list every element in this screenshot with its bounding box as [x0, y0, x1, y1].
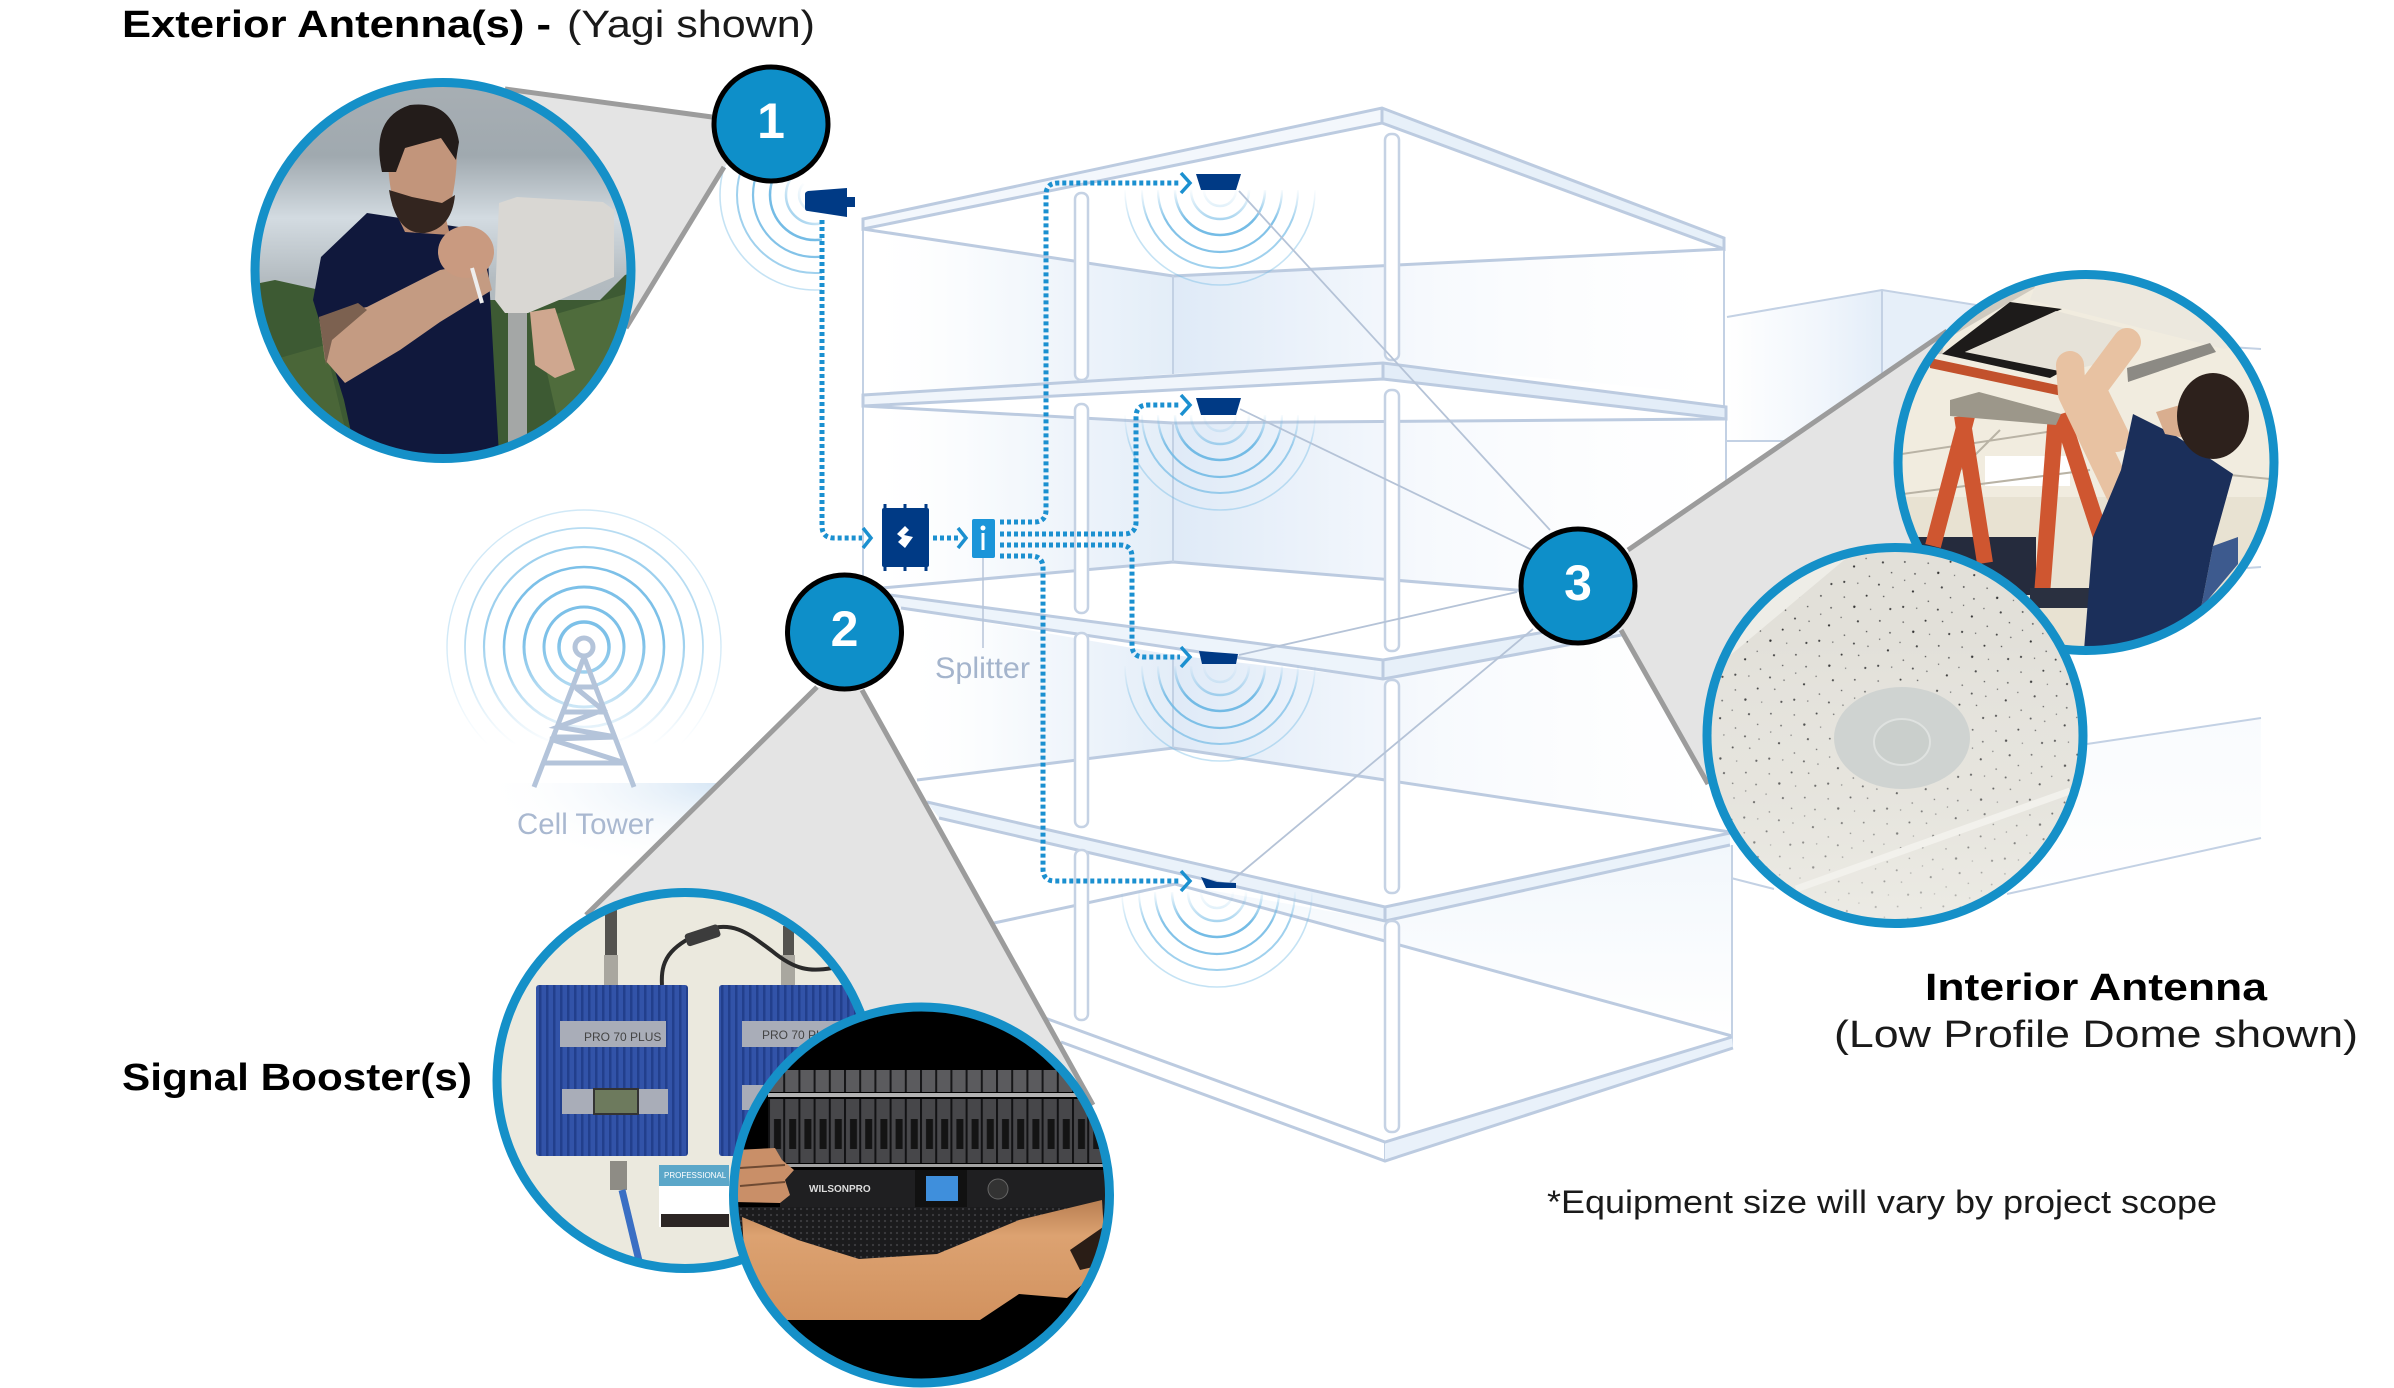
ladder rung — [2030, 588, 2090, 608]
leader lines from antennas to badge 3 — [1230, 191, 1550, 882]
icon: signal booster — [882, 504, 929, 571]
hand shadow — [1070, 1228, 1102, 1270]
signal waves: interior antenna 1 — [1125, 190, 1315, 285]
blue chair — [2201, 537, 2238, 608]
neck skin — [2156, 405, 2185, 438]
left hand — [735, 1148, 794, 1203]
icon: exterior antenna — [805, 188, 855, 217]
floor 3 walls — [901, 608, 1730, 832]
slab 4 — [927, 802, 1730, 921]
hand — [438, 226, 494, 270]
large ceiling tile — [2034, 285, 2040, 288]
number badge 2: 2 — [831, 601, 858, 657]
floor 2 walls — [863, 406, 1726, 608]
neck — [392, 205, 450, 235]
slab 1 — [863, 108, 1724, 249]
jumper cable — [662, 927, 832, 985]
footnote: *Equipment size will vary by project scope — [1547, 1184, 2217, 1220]
lighter ceiling corner — [1700, 545, 1862, 680]
booster unit 1 — [536, 985, 688, 1156]
callout cone 3 — [1621, 331, 2086, 784]
ladder legs — [1933, 414, 2104, 595]
tower mast — [534, 638, 634, 787]
photo: technician installing ceiling antenna — [1890, 270, 2285, 667]
hair — [2177, 373, 2249, 459]
arms — [2070, 342, 2127, 492]
cable to antenna 2 — [1000, 405, 1180, 534]
heading: exterior antenna — [122, 4, 815, 46]
installation sign — [659, 1165, 729, 1227]
antennas — [605, 905, 617, 955]
right ceiling rail — [2127, 343, 2216, 382]
dome antenna — [1834, 687, 1970, 789]
ladder cap — [1950, 392, 2061, 425]
cable to antenna 4 — [1000, 556, 1180, 881]
other arm — [530, 308, 575, 378]
heading: interior antenna: Interior Antenna — [1925, 967, 2268, 1009]
arm — [742, 1200, 1106, 1320]
monitor — [1916, 537, 2036, 595]
inner ceiling tile — [1965, 311, 2127, 372]
ground shading — [470, 783, 740, 873]
tower signal rings — [447, 510, 721, 784]
icon: splitter — [972, 519, 995, 558]
slab 2 — [863, 363, 1726, 419]
photo: technician with exterior antenna — [250, 78, 640, 470]
ceiling grid — [1895, 430, 2280, 495]
number badge 1: 1 — [757, 93, 785, 149]
booster unit 2: PRO 70 PLUS — [762, 1028, 839, 1042]
signal waves: interior antenna 3 — [1125, 666, 1315, 761]
shirt — [2084, 414, 2233, 650]
cable booster to splitter — [933, 536, 958, 540]
orange beam — [1930, 358, 2062, 396]
cable from exterior antenna to booster — [822, 220, 862, 538]
splitter label: Splitter — [935, 652, 1030, 685]
booster unit 2 — [719, 985, 860, 1156]
photo: wall-mounted boosters — [490, 885, 880, 1275]
slab 3 — [882, 594, 1730, 679]
photo: rack-mounted booster: WILSONPRO — [809, 1184, 871, 1195]
support columns — [1075, 134, 1399, 1132]
face — [388, 138, 457, 203]
splitter label — [935, 558, 1030, 685]
building floor plan wireframe — [863, 108, 1733, 1161]
installation sign: PROFESSIONAL — [664, 1171, 727, 1180]
number badge 3 — [1521, 529, 1635, 643]
callout cone 2 — [586, 687, 1093, 1195]
bottom slab — [1045, 1018, 1733, 1161]
heading: interior antenna — [1834, 967, 2358, 1056]
wall and ceiling lines — [863, 229, 1732, 1036]
coax and connector — [610, 1161, 627, 1190]
antenna panel — [495, 197, 614, 313]
light band — [1985, 456, 2070, 486]
pole — [508, 313, 527, 442]
front panel — [780, 1170, 1120, 1207]
number badge 2 — [788, 575, 902, 689]
cable to antenna 3 — [1000, 545, 1180, 657]
icons: interior antennas — [1196, 174, 1241, 888]
grey rail — [1938, 286, 2035, 354]
booster unit 1: PRO 70 PLUS — [584, 1030, 661, 1044]
forearm — [319, 262, 492, 383]
tattoo — [319, 303, 367, 365]
photo: low profile dome antenna on ceiling — [1700, 540, 2090, 935]
hair — [379, 104, 459, 172]
lower tile brightening — [1700, 640, 2090, 935]
signal waves: interior antenna 2 — [1125, 415, 1315, 510]
tile seam — [1796, 791, 2070, 889]
signal waves: exterior antenna — [719, 166, 822, 291]
vent mesh — [738, 1207, 1104, 1259]
heading: exterior antenna: Exterior Antenna(s) - — [122, 4, 551, 46]
wall — [1906, 497, 2266, 646]
heading: signal booster: Signal Booster(s) — [122, 1057, 472, 1099]
heading: exterior antenna: (Yagi shown) — [567, 4, 815, 46]
cable to antenna 1 — [1000, 183, 1180, 522]
number badge 1 — [714, 67, 828, 181]
arrows into antennas — [1181, 173, 1190, 891]
trees — [260, 274, 626, 446]
cell tower — [447, 510, 740, 873]
drive bays — [770, 1070, 1073, 1092]
shirt — [313, 213, 499, 455]
photo: rack-mounted booster — [725, 1000, 1120, 1388]
callout cone 1 — [443, 89, 771, 328]
arrow into splitter — [958, 528, 966, 548]
floor 1 walls — [863, 229, 1724, 395]
heading: interior antenna: (Low Profile Dome shown) — [1834, 1014, 2358, 1056]
right building wing — [1727, 290, 2261, 894]
signal waves: interior antenna 4 — [1122, 892, 1312, 987]
arrow into booster — [863, 528, 871, 548]
number badge 3: 3 — [1564, 555, 1592, 611]
black ceiling opening — [1942, 302, 2070, 378]
floor 4 wall — [1175, 845, 1732, 1036]
beard — [389, 190, 455, 233]
tower label: Cell Tower — [517, 808, 654, 841]
coax — [472, 268, 482, 303]
